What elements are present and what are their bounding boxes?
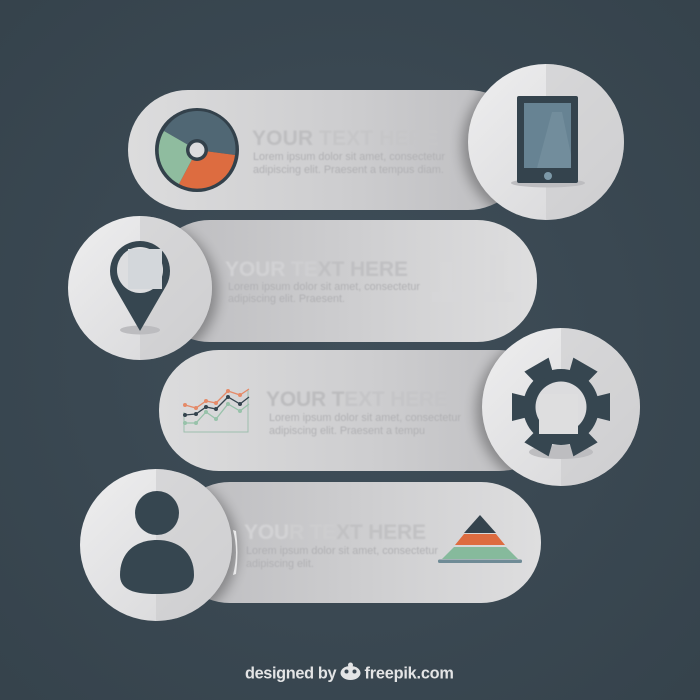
text block 2: Lorem ipsum dolor sit amet, consectetur bbox=[228, 281, 420, 293]
text block 1: Lorem ipsum dolor sit amet, consectetur bbox=[253, 151, 445, 163]
light arc beside disc 4 bbox=[233, 530, 238, 575]
disc 2 bbox=[68, 216, 212, 360]
icon: freepik mascot bbox=[340, 662, 360, 680]
icon: pyramid bbox=[438, 515, 522, 563]
text block 3: adipiscing elit. Praesent a tempu bbox=[269, 425, 425, 437]
text block 3 bbox=[269, 412, 461, 437]
disc shadow 4 bbox=[206, 485, 244, 602]
panel: row 3 bbox=[159, 328, 640, 488]
disc 3 bbox=[482, 328, 640, 486]
icon: pie chart bbox=[155, 108, 239, 192]
text block 4: adipiscing elit. bbox=[246, 558, 314, 570]
heading 1: YOUR TEXT HERE bbox=[252, 127, 438, 150]
bar 3 bbox=[159, 350, 559, 471]
disc shadow 1 bbox=[456, 91, 496, 208]
text block 4: Lorem ipsum dolor sit amet, consectetur bbox=[246, 545, 438, 557]
bar 2 bbox=[150, 220, 537, 342]
text block 2: adipiscing elit. Praesent. bbox=[228, 293, 345, 305]
heading 2: YOUR TEXT HERE bbox=[225, 258, 408, 281]
heading 4: YOUR TEXT HERE bbox=[244, 521, 426, 544]
panel: row 1 bbox=[128, 64, 624, 222]
footer credit: freepik.com bbox=[364, 664, 454, 682]
text block 4 bbox=[246, 545, 438, 570]
bar 1 bbox=[128, 90, 528, 210]
icon: map pin bbox=[110, 241, 170, 334]
disc 1 bbox=[468, 64, 624, 220]
footer credit bbox=[245, 662, 454, 682]
footer credit: designed by bbox=[245, 664, 336, 682]
disc shadow 3 bbox=[470, 350, 512, 471]
icon: person bbox=[120, 491, 194, 594]
disc shadow 2 bbox=[180, 226, 224, 342]
text block 1 bbox=[253, 151, 445, 176]
icon: line chart bbox=[183, 389, 249, 432]
icon: gear bbox=[512, 358, 610, 459]
panel: row 2 bbox=[68, 216, 537, 362]
text block 2 bbox=[228, 281, 420, 305]
heading 3: YOUR TEXT HERE bbox=[266, 388, 448, 411]
text block 3: Lorem ipsum dolor sit amet, consectetur bbox=[269, 412, 461, 424]
disc 4 bbox=[80, 469, 232, 621]
icon: tablet bbox=[511, 96, 585, 188]
panel: row 4 bbox=[80, 469, 541, 623]
text block 1: adipiscing elit. Praesent a tempus diam. bbox=[253, 164, 444, 176]
icon: faded bar chart bbox=[432, 251, 514, 302]
bar 4 bbox=[170, 482, 541, 603]
